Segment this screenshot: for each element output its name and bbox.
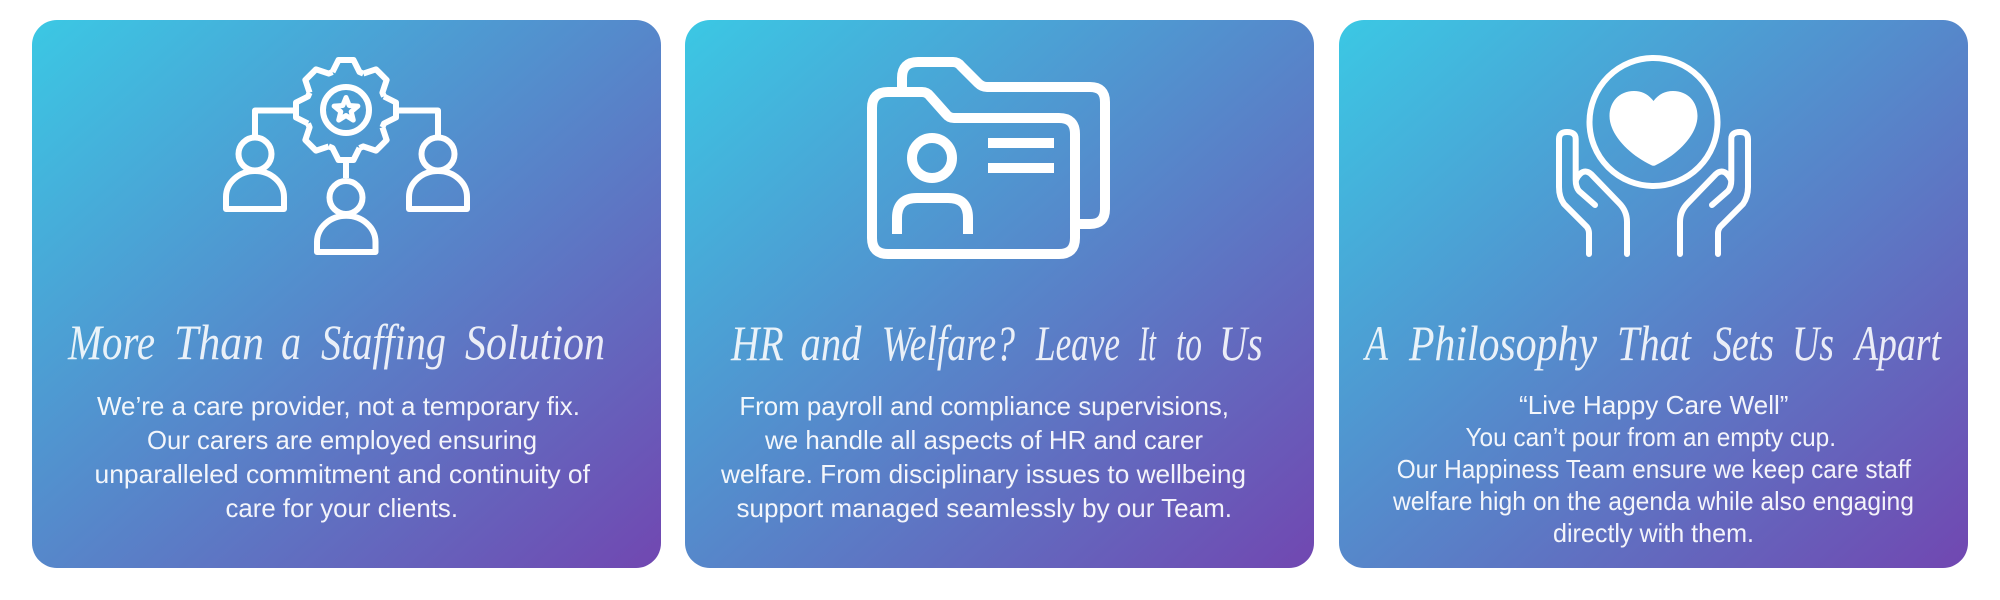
body text: Our Happiness Team ensure we keep care staff bbox=[1397, 454, 1912, 484]
heading: HR and Welfare? Leave It to Us: to bbox=[1176, 315, 1202, 371]
body text: Our carers are employed ensuring bbox=[147, 425, 537, 455]
icon part: left person bbox=[226, 138, 284, 209]
body text: unparalleled commitment and continuity of bbox=[94, 459, 591, 489]
heading: More Than a Staffing Solution: Than bbox=[174, 314, 264, 370]
heading: HR and Welfare? Leave It to Us: Welfare? bbox=[882, 315, 1015, 371]
icon part: circle bbox=[1590, 58, 1718, 186]
heading: More Than a Staffing Solution: a bbox=[281, 314, 301, 370]
heading: A Philosophy That Sets Us Apart: Apart bbox=[1853, 315, 1942, 371]
card background bbox=[1339, 20, 1968, 568]
icon part: connectors bbox=[255, 110, 438, 178]
heading: More Than a Staffing Solution: Solution bbox=[465, 314, 605, 370]
heading: More Than a Staffing Solution: More bbox=[67, 314, 155, 370]
body text: directly with them. bbox=[1553, 518, 1754, 548]
icon part: person head bbox=[912, 138, 952, 178]
body text: welfare. From disciplinary issues to wellbeing bbox=[720, 459, 1246, 489]
body text: care for your clients. bbox=[226, 493, 458, 523]
heading: A Philosophy That Sets Us Apart bbox=[1363, 315, 1942, 371]
heading: More Than a Staffing Solution bbox=[67, 314, 605, 370]
card background bbox=[32, 20, 661, 568]
body text: support managed seamlessly by our Team. bbox=[736, 493, 1232, 523]
body text: “Live Happy Care Well” bbox=[1519, 390, 1788, 420]
body text: We’re a care provider, not a temporary fix. bbox=[97, 391, 580, 421]
icon: gear with star connected to three people bbox=[226, 60, 467, 252]
heading: A Philosophy That Sets Us Apart: Sets bbox=[1713, 315, 1774, 371]
icon part: heart bbox=[1610, 91, 1698, 166]
heading: HR and Welfare? Leave It to Us: and bbox=[800, 315, 862, 371]
heading: HR and Welfare? Leave It to Us: Us bbox=[1219, 315, 1263, 371]
heading: HR and Welfare? Leave It to Us bbox=[730, 315, 1263, 371]
body text bbox=[1392, 390, 1914, 548]
icon part: text lines bbox=[988, 143, 1054, 168]
icon part: front folder bbox=[872, 92, 1075, 254]
panel: HR and welfare bbox=[685, 20, 1314, 568]
heading: More Than a Staffing Solution: Staffing bbox=[321, 314, 446, 370]
heading: HR and Welfare? Leave It to Us: HR bbox=[730, 315, 784, 371]
heading: A Philosophy That Sets Us Apart: Us bbox=[1792, 315, 1834, 371]
icon part: back folder bbox=[902, 62, 1105, 224]
body text: we handle all aspects of HR and carer bbox=[764, 425, 1203, 455]
panel: a philosophy that sets us apart bbox=[1339, 20, 1968, 568]
icon part: left hand bbox=[1559, 132, 1627, 254]
heading: HR and Welfare? Leave It to Us: It bbox=[1138, 315, 1157, 371]
icon: personnel folder bbox=[872, 62, 1105, 254]
heading: A Philosophy That Sets Us Apart: A bbox=[1363, 315, 1388, 371]
panel: more than a staffing solution bbox=[32, 20, 661, 568]
icon: hands holding heart bbox=[1559, 58, 1748, 254]
body text bbox=[94, 391, 591, 523]
body text: welfare high on the agenda while also engaging bbox=[1392, 486, 1914, 516]
body text: You can’t pour from an empty cup. bbox=[1466, 422, 1836, 452]
icon part: middle person bbox=[317, 181, 376, 252]
heading: A Philosophy That Sets Us Apart: That bbox=[1617, 315, 1692, 371]
heading: HR and Welfare? Leave It to Us: Leave bbox=[1035, 315, 1120, 371]
card background bbox=[685, 20, 1314, 568]
heading: A Philosophy That Sets Us Apart: Philosophy bbox=[1408, 315, 1598, 371]
body text bbox=[720, 391, 1246, 523]
icon part: person shoulders bbox=[897, 198, 968, 234]
icon part: gear outline bbox=[296, 60, 396, 160]
icon part: right hand bbox=[1680, 132, 1748, 254]
body text: From payroll and compliance supervisions, bbox=[739, 391, 1229, 421]
icon part: right person bbox=[409, 138, 467, 209]
